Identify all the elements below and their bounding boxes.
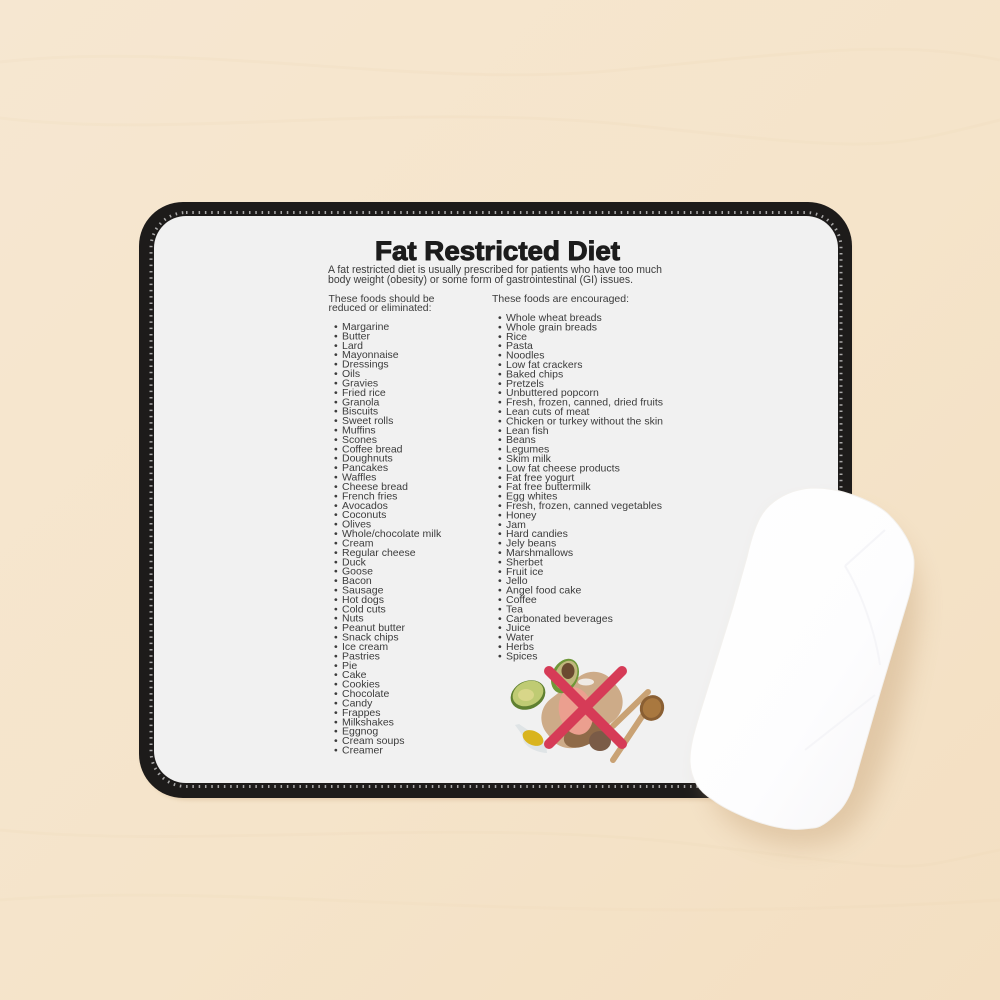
list: encouraged foods: Spices <box>506 650 538 662</box>
list: encouraged foods: Water <box>506 632 534 644</box>
list: foods to reduce or eliminate: • <box>334 716 338 728</box>
list: foods to reduce or eliminate: • <box>334 594 338 606</box>
avocado halves <box>506 654 584 715</box>
list: foods to reduce or eliminate: Hot dogs <box>342 594 384 606</box>
stitching dots <box>151 212 841 786</box>
list: foods to reduce or eliminate: Whole/chocolate milk <box>342 528 442 540</box>
list: encouraged foods: Baked chips <box>506 368 563 380</box>
list: foods to reduce or eliminate: • <box>334 472 338 484</box>
mouse body <box>690 488 914 829</box>
list: foods to reduce or eliminate: • <box>334 566 338 578</box>
title: Fat Restricted Diet <box>375 236 620 266</box>
list: foods to reduce or eliminate: Cheese bread <box>342 481 408 493</box>
list: foods to reduce or eliminate: • <box>334 707 338 719</box>
list: encouraged foods: • <box>498 481 502 493</box>
list: encouraged foods: Legumes <box>506 444 549 456</box>
list: foods to reduce or eliminate <box>334 321 442 756</box>
list: encouraged foods: • <box>498 500 502 512</box>
list: encouraged foods: • <box>498 594 502 606</box>
list: foods to reduce or eliminate: Pie <box>342 660 357 672</box>
list: foods to reduce or eliminate: • <box>334 537 338 549</box>
list: encouraged foods: Lean fish <box>506 425 549 437</box>
list: foods to reduce or eliminate: • <box>334 726 338 738</box>
list: foods to reduce or eliminate: Cake <box>342 669 367 681</box>
list: encouraged foods: • <box>498 641 502 653</box>
list: foods to reduce or eliminate: Pastries <box>342 650 380 662</box>
list: foods to reduce or eliminate: • <box>334 584 338 596</box>
left column heading: These foods should be <box>328 293 435 305</box>
list: foods to reduce or eliminate: • <box>334 387 338 399</box>
list: encouraged foods: • <box>498 340 502 352</box>
list: encouraged foods: • <box>498 387 502 399</box>
list: foods to reduce or eliminate: • <box>334 650 338 662</box>
list: foods to reduce or eliminate: • <box>334 406 338 418</box>
list: foods to reduce or eliminate: • <box>334 669 338 681</box>
mouse highlights <box>805 530 885 750</box>
list: foods to reduce or eliminate: • <box>334 632 338 644</box>
list: foods to reduce or eliminate: • <box>334 500 338 512</box>
list: foods to reduce or eliminate: Creamer <box>342 744 383 756</box>
list: foods to reduce or eliminate: Cold cuts <box>342 603 386 615</box>
list: encouraged foods: Chicken or turkey without the skin <box>506 415 663 427</box>
list: foods to reduce or eliminate: • <box>334 660 338 672</box>
list: encouraged foods: • <box>498 603 502 615</box>
list: encouraged foods: • <box>498 509 502 521</box>
list: encouraged foods: Beans <box>506 434 536 446</box>
list: foods to reduce or eliminate: Candy <box>342 697 373 709</box>
list: encouraged foods: Skim milk <box>506 453 552 465</box>
icon: crossed-out fatty foods <box>506 654 668 760</box>
list: foods to reduce or eliminate: • <box>334 462 338 474</box>
list: foods to reduce or eliminate: Eggnog <box>342 726 378 738</box>
list: encouraged foods: • <box>498 519 502 531</box>
list: encouraged foods: Honey <box>506 509 537 521</box>
computer mouse <box>690 488 918 846</box>
list: foods to reduce or eliminate: • <box>334 509 338 521</box>
list: foods to reduce or eliminate: Cream <box>342 537 374 549</box>
list: encouraged foods: • <box>498 472 502 484</box>
list: encouraged foods: • <box>498 613 502 625</box>
list: encouraged foods: • <box>498 491 502 503</box>
list: foods to reduce or eliminate: • <box>334 528 338 540</box>
list: foods to reduce or eliminate: Avocados <box>342 500 388 512</box>
list: foods to reduce or eliminate: Butter <box>342 330 371 342</box>
list: encouraged foods: Whole wheat breads <box>506 312 602 324</box>
list: encouraged foods: Jely beans <box>506 538 556 550</box>
list: encouraged foods: • <box>498 415 502 427</box>
wooden spoons <box>613 692 648 760</box>
intro text: A fat restricted diet is usually prescribed for patients who have too much <box>328 264 662 276</box>
list: foods to reduce or eliminate: Olives <box>342 519 371 531</box>
ground seeds <box>589 731 611 751</box>
list: encouraged foods: Fresh, frozen, canned, dried fruits <box>506 397 663 409</box>
list: encouraged foods: • <box>498 444 502 456</box>
list: encouraged foods: Whole grain breads <box>506 321 597 333</box>
list: foods to reduce or eliminate: Coconuts <box>342 509 386 521</box>
list: encouraged foods: • <box>498 566 502 578</box>
list: foods to reduce or eliminate: • <box>334 697 338 709</box>
list: encouraged foods: • <box>498 434 502 446</box>
list: foods to reduce or eliminate: • <box>334 556 338 568</box>
list: foods to reduce or eliminate: Lard <box>342 340 363 352</box>
list: encouraged foods: Pretzels <box>506 378 544 390</box>
left column heading: reduced or eliminated: <box>328 302 432 314</box>
list: foods to reduce or eliminate: • <box>334 613 338 625</box>
list: encouraged foods: • <box>498 528 502 540</box>
list: encouraged foods: • <box>498 556 502 568</box>
list: encouraged foods: Fresh, frozen, canned vegetables <box>506 500 662 512</box>
list: foods to reduce or eliminate: • <box>334 744 338 756</box>
red cross <box>549 671 622 744</box>
list: foods to reduce or eliminate: Sausage <box>342 584 384 596</box>
list: encouraged foods: • <box>498 331 502 343</box>
list: foods to reduce or eliminate: Scones <box>342 434 377 446</box>
spoon of seeds <box>636 691 668 725</box>
list: foods to reduce or eliminate: Chocolate <box>342 688 389 700</box>
list: foods to reduce or eliminate: • <box>334 368 338 380</box>
intro text <box>328 264 662 286</box>
list: encouraged foods: Marshmallows <box>506 547 573 559</box>
list: foods to reduce or eliminate: • <box>334 340 338 352</box>
list: encouraged foods: Jello <box>506 575 528 587</box>
mouse mat <box>139 202 852 800</box>
list: foods to reduce or eliminate: Gravies <box>342 378 378 390</box>
list: encouraged foods: Sherbet <box>506 556 543 568</box>
mat black stitched border <box>139 202 852 798</box>
list: foods to reduce or eliminate: • <box>334 434 338 446</box>
left column heading <box>328 293 435 314</box>
right column heading: These foods are encouraged: <box>492 293 629 305</box>
list: foods to reduce or eliminate: Doughnuts <box>342 453 393 465</box>
mat printed surface <box>154 216 838 783</box>
list: encouraged foods: • <box>498 632 502 644</box>
list: foods to reduce or eliminate: • <box>334 641 338 653</box>
list: foods to reduce or eliminate: Goose <box>342 566 373 578</box>
list: encouraged foods: Angel food cake <box>506 585 581 597</box>
list: encouraged foods: • <box>498 321 502 333</box>
list: foods to reduce or eliminate: French fries <box>342 490 397 502</box>
list: foods to reduce or eliminate: Bacon <box>342 575 372 587</box>
list: encouraged foods: Coffee <box>506 594 537 606</box>
wooden board <box>532 662 632 758</box>
list: encouraged foods: • <box>498 350 502 362</box>
list: foods to reduce or eliminate: Milkshakes <box>342 716 394 728</box>
list: encouraged foods: Herbs <box>506 641 534 653</box>
list: foods to reduce or eliminate: • <box>334 378 338 390</box>
list: foods to reduce or eliminate: • <box>334 396 338 408</box>
list: foods to reduce or eliminate: Oils <box>342 368 360 380</box>
list: encouraged foods: • <box>498 359 502 371</box>
list: foods to reduce or eliminate: • <box>334 415 338 427</box>
list: encouraged foods: Low fat crackers <box>506 359 582 371</box>
list: encouraged foods: • <box>498 312 502 324</box>
list: encouraged foods: Pasta <box>506 340 533 352</box>
list: foods to reduce or eliminate: • <box>334 359 338 371</box>
list: foods to reduce or eliminate: • <box>334 519 338 531</box>
list: foods to reduce or eliminate: • <box>334 688 338 700</box>
list: encouraged foods: • <box>498 368 502 380</box>
list: encouraged foods: Low fat cheese products <box>506 462 620 474</box>
list: encouraged foods: Fruit ice <box>506 566 544 578</box>
list: encouraged foods: • <box>498 462 502 474</box>
list: encouraged foods: Unbuttered popcorn <box>506 387 599 399</box>
list: foods to reduce or eliminate: • <box>334 622 338 634</box>
list: foods to reduce or eliminate: • <box>334 443 338 455</box>
list: foods to reduce or eliminate: Nuts <box>342 613 364 625</box>
list: foods to reduce or eliminate: Muffins <box>342 424 376 436</box>
list: foods to reduce or eliminate: Coffee bread <box>342 443 403 455</box>
list: foods to reduce or eliminate: Frappes <box>342 707 381 719</box>
list: encouraged foods: Tea <box>506 603 523 615</box>
list: foods to reduce or eliminate: Cookies <box>342 679 380 691</box>
list: encouraged foods: • <box>498 538 502 550</box>
list: foods to reduce or eliminate: Fried rice <box>342 387 386 399</box>
oil dish <box>515 724 547 753</box>
list: foods to reduce or eliminate: • <box>334 735 338 747</box>
list: encouraged foods: • <box>498 397 502 409</box>
list: encouraged foods: • <box>498 575 502 587</box>
list: encouraged foods: Noodles <box>506 350 545 362</box>
list: foods to reduce or eliminate: Biscuits <box>342 406 378 418</box>
list: encouraged foods: • <box>498 585 502 597</box>
list: foods to reduce or eliminate: Regular cheese <box>342 547 416 559</box>
list: encouraged foods <box>498 312 663 662</box>
list: foods to reduce or eliminate: Sweet rolls <box>342 415 393 427</box>
list: foods to reduce or eliminate: • <box>334 424 338 436</box>
list: encouraged foods: Fat free buttermilk <box>506 481 591 493</box>
list: foods to reduce or eliminate: Duck <box>342 556 367 568</box>
list: encouraged foods: Jam <box>506 519 526 531</box>
list: encouraged foods: • <box>498 406 502 418</box>
list: foods to reduce or eliminate: Waffles <box>342 472 376 484</box>
list: foods to reduce or eliminate: Peanut butter <box>342 622 406 634</box>
list: encouraged foods: Egg whites <box>506 491 557 503</box>
list: foods to reduce or eliminate: Cream soups <box>342 735 404 747</box>
list: foods to reduce or eliminate: Dressings <box>342 359 389 371</box>
list: foods to reduce or eliminate: Mayonnaise <box>342 349 399 361</box>
list: foods to reduce or eliminate: Margarine <box>342 321 389 333</box>
list: encouraged foods: • <box>498 453 502 465</box>
list: foods to reduce or eliminate: • <box>334 547 338 559</box>
list: foods to reduce or eliminate: • <box>334 679 338 691</box>
list: encouraged foods: • <box>498 547 502 559</box>
salmon fillet <box>554 684 598 738</box>
list: foods to reduce or eliminate: • <box>334 490 338 502</box>
list: foods to reduce or eliminate: • <box>334 575 338 587</box>
list: foods to reduce or eliminate: • <box>334 453 338 465</box>
list: encouraged foods: Rice <box>506 331 527 343</box>
list: encouraged foods: • <box>498 425 502 437</box>
list: encouraged foods: • <box>498 622 502 634</box>
list: foods to reduce or eliminate: • <box>334 481 338 493</box>
list: encouraged foods: Hard candies <box>506 528 568 540</box>
list: foods to reduce or eliminate: • <box>334 349 338 361</box>
list: encouraged foods: • <box>498 650 502 662</box>
intro text: body weight (obesity) or some form of gastrointestinal (GI) issues. <box>328 274 633 286</box>
list: encouraged foods: Juice <box>506 622 531 634</box>
list: encouraged foods: Carbonated beverages <box>506 613 613 625</box>
list: foods to reduce or eliminate: Ice cream <box>342 641 388 653</box>
list: foods to reduce or eliminate: • <box>334 321 338 333</box>
list: foods to reduce or eliminate: • <box>334 603 338 615</box>
list: foods to reduce or eliminate: • <box>334 330 338 342</box>
list: encouraged foods: Lean cuts of meat <box>506 406 590 418</box>
list: foods to reduce or eliminate: Snack chips <box>342 632 399 644</box>
list: foods to reduce or eliminate: Granola <box>342 396 380 408</box>
list: foods to reduce or eliminate: Pancakes <box>342 462 388 474</box>
list: encouraged foods: Fat free yogurt <box>506 472 574 484</box>
list: encouraged foods: • <box>498 378 502 390</box>
